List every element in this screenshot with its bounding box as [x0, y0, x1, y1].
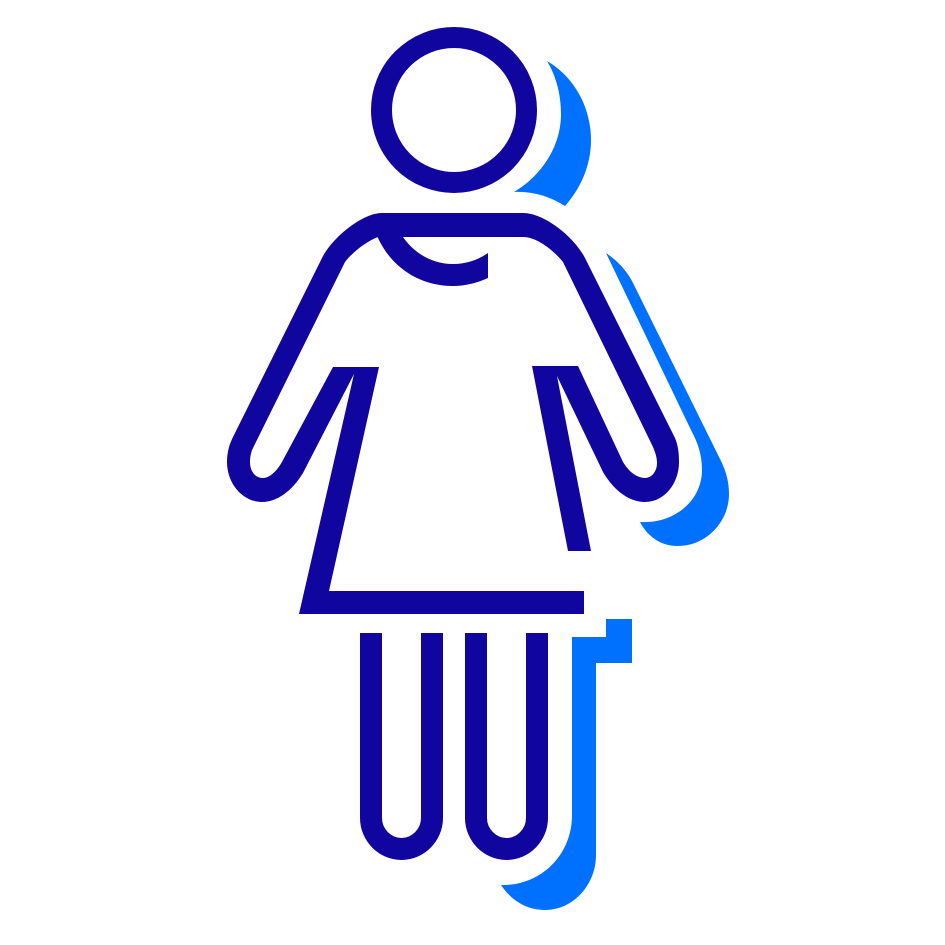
icon: navy outline figure [227, 38, 679, 849]
icon: blue shadow [501, 61, 729, 910]
head [382, 38, 526, 182]
left leg [371, 633, 432, 849]
torso, arms and dress [227, 213, 679, 614]
right leg [476, 633, 537, 849]
leg shadow [501, 619, 632, 910]
head shadow [514, 61, 591, 206]
arm shadow [606, 253, 729, 546]
neckline [376, 234, 488, 286]
